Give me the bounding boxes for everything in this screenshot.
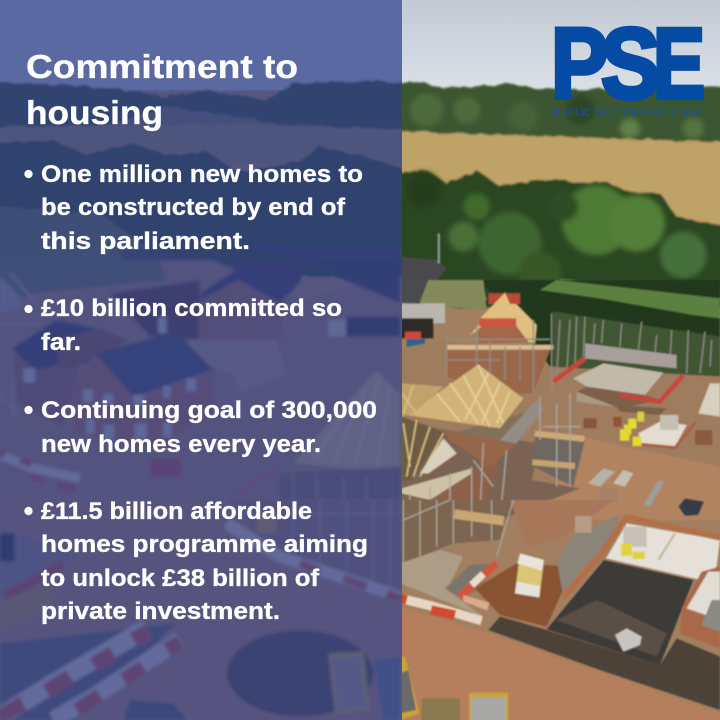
skips xyxy=(400,657,419,720)
photo: construction site, right half xyxy=(393,0,720,720)
logo: PSE: S xyxy=(601,8,660,120)
logo: PSE: P xyxy=(551,8,608,119)
bullet: one million new homes: One million new homes to xyxy=(41,161,363,188)
house 1 xyxy=(447,345,550,393)
title: Commitment to xyxy=(26,48,298,85)
photo: housing estate, left half xyxy=(0,0,407,720)
slab xyxy=(606,523,720,579)
road left and fencing xyxy=(2,531,73,588)
site left xyxy=(10,274,30,412)
dark soil and skips xyxy=(227,630,373,717)
logo: PSE: E xyxy=(653,9,705,120)
house 3 with flat slab xyxy=(585,343,677,368)
bullet: affordable homes programme xyxy=(24,498,368,625)
right house xyxy=(680,567,720,648)
title: housing xyxy=(26,94,163,131)
road xyxy=(393,607,720,720)
house 2 with trusses xyxy=(402,423,580,520)
bullet: affordable homes programme: private investment. xyxy=(41,598,280,625)
bullet: one million new homes: be constructed by end of xyxy=(41,194,346,221)
bullet: affordable homes programme: £11.5 billion affordable xyxy=(41,498,312,525)
bullet: 300,000 new homes: Continuing goal of 300,000 xyxy=(41,397,377,424)
logo: PSE: PUBLIC SECTOR EXECUTIVE xyxy=(553,107,702,119)
barriers xyxy=(0,455,80,478)
ground xyxy=(406,342,720,436)
house C xyxy=(198,277,287,342)
asphalt xyxy=(547,560,693,665)
barriers xyxy=(0,628,147,717)
bullet: one million new homes xyxy=(24,161,363,255)
logo: PSE xyxy=(551,8,705,120)
house A xyxy=(94,358,96,360)
house B xyxy=(16,358,76,422)
bullet: 10 billion committed xyxy=(24,295,342,356)
barriers xyxy=(400,598,482,621)
yellow bags and slab xyxy=(638,422,687,447)
bullet: affordable homes programme: homes programme aiming xyxy=(41,531,368,558)
bullet: 10 billion committed: far. xyxy=(41,329,81,356)
panel: blue overlay xyxy=(0,0,402,720)
truss xyxy=(293,370,400,473)
foreground: drive, slab, road, skips xyxy=(393,500,720,720)
title xyxy=(26,48,298,131)
hedges and grass behind the site xyxy=(400,280,720,520)
insulation pallet xyxy=(514,562,544,598)
bullet: affordable homes programme: to unlock £38 billion of xyxy=(41,565,320,592)
bullet: one million new homes: this parliament. xyxy=(41,228,250,255)
bullet: 300,000 new homes: new homes every year. xyxy=(41,431,321,458)
bullet: 10 billion committed: £10 billion committed so xyxy=(41,295,342,322)
landscape: trees and field xyxy=(393,81,720,307)
bullet: 300,000 new homes xyxy=(24,397,377,458)
